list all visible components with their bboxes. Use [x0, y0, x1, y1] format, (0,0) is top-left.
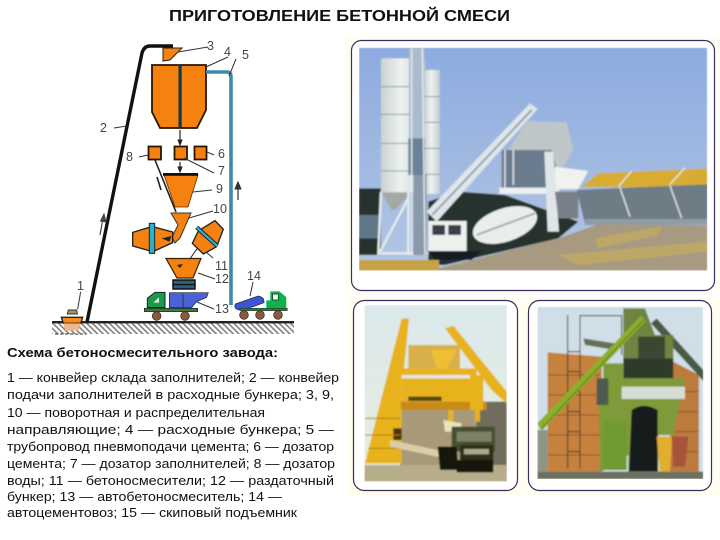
dark treeline: [359, 188, 578, 265]
component 11: right mixer: [186, 221, 223, 265]
component number labels: 5: [242, 48, 249, 62]
legend body: цемента; 7 — дозатор заполнителей; 8 — дозатор: [7, 456, 335, 471]
component number labels: 13: [215, 302, 229, 316]
component 14: cement truck: [235, 292, 287, 319]
silos: [378, 58, 440, 255]
leader lines: [114, 47, 253, 309]
aggregate bins: [577, 168, 707, 225]
mixer truck: [428, 199, 542, 260]
silo ladder tower: [409, 48, 424, 138]
inclined conveyors: [427, 103, 538, 222]
flow arrows: [178, 130, 182, 172]
gravel slope: [438, 224, 707, 271]
component 2: skip conveyor: [87, 46, 173, 322]
photo: [364, 305, 507, 482]
component number labels: 6: [218, 147, 225, 161]
component number labels: 12: [215, 272, 229, 286]
dark right conveyor: [651, 318, 703, 381]
stone wall background: [400, 410, 507, 467]
component number labels: 3: [207, 39, 214, 53]
component number labels: 4: [224, 45, 231, 59]
legend body: бункер; 13 — автобетоносмеситель; 14 —: [7, 489, 282, 504]
component number labels: [77, 39, 261, 316]
water line from doser 8: [155, 160, 176, 212]
green plant tower: [597, 308, 685, 472]
photo: [359, 48, 707, 271]
component number labels: 9: [216, 182, 223, 196]
legend body: воды; 11 — бетоносмесители; 12 — раздаточный: [7, 473, 334, 488]
component 9: rotary chute hopper: [163, 173, 198, 207]
legend body: 1 — конвейер склада заполнителей; 2 — конвейер: [7, 370, 339, 385]
red-brown skip: [672, 437, 688, 467]
legend body: [7, 370, 339, 520]
component number labels: 10: [213, 202, 227, 216]
ground: [537, 472, 703, 479]
batching tower: [500, 121, 588, 232]
component 13: concrete mixer truck: [144, 292, 208, 320]
component 12: discharge hopper: [166, 258, 201, 289]
component 4: supply bunkers: [152, 65, 206, 128]
legend heading: Схема бетоносмесительного завода:: [7, 345, 278, 360]
panel frame: [354, 300, 518, 490]
component 11: left mixer: [133, 223, 173, 253]
component 3: distribution chute: [163, 48, 182, 61]
title: ПРИГОТОВЛЕНИЕ БЕТОННОЙ СМЕСИ: [169, 7, 510, 25]
yellow skip: [657, 437, 672, 472]
ground: [364, 465, 507, 482]
component number labels: 14: [247, 269, 261, 283]
component 1: aggregate store conveyor: [55, 292, 87, 334]
panel frame: [352, 40, 714, 290]
legend body: трубопровод пневмоподачи цемента; 6 — дозатор: [7, 439, 334, 454]
component 6: cement doser: [194, 146, 206, 160]
component number labels: 11: [215, 259, 228, 273]
yellow frame: [365, 318, 507, 463]
green inclined conveyor: [537, 316, 646, 431]
photo panel: yellow batching plant with dump truck: [347, 297, 523, 495]
arrow on conveyor: [100, 214, 106, 235]
component number labels: 8: [126, 150, 133, 164]
brick walls: [548, 352, 602, 472]
component number labels: 2: [100, 121, 107, 135]
legend body: автоцементовоз; 15 — скиповый подъемник: [7, 505, 297, 520]
photo panel: green batching plant with brick walls: [523, 297, 720, 495]
pipeline flow arrow: [235, 182, 241, 200]
photo panel: plant with silos and mixer truck: [345, 36, 720, 296]
legend body: направляющие; 4 — расходные бункера; 5 —: [7, 422, 334, 437]
ground with hatching: [52, 321, 294, 334]
scaffold ladder: [568, 315, 622, 468]
schematic diagram of concrete plant: [52, 39, 294, 334]
photo: [537, 307, 703, 479]
component number labels: 1: [77, 279, 84, 293]
component 8: water doser: [148, 146, 161, 160]
dump truck: [438, 420, 495, 472]
legend body: 10 — поворотная и распределительная: [7, 405, 265, 420]
component 10: distribution chute: [171, 213, 191, 243]
component 5: cement pipeline: [206, 72, 231, 305]
component 7: aggregate doser: [174, 146, 187, 160]
text block: plant legend: [7, 345, 339, 520]
legend body: подачи заполнителей в расходные бункера; 3, 9,: [7, 387, 334, 402]
component number labels: 7: [218, 164, 225, 178]
panel frame: [528, 300, 712, 490]
